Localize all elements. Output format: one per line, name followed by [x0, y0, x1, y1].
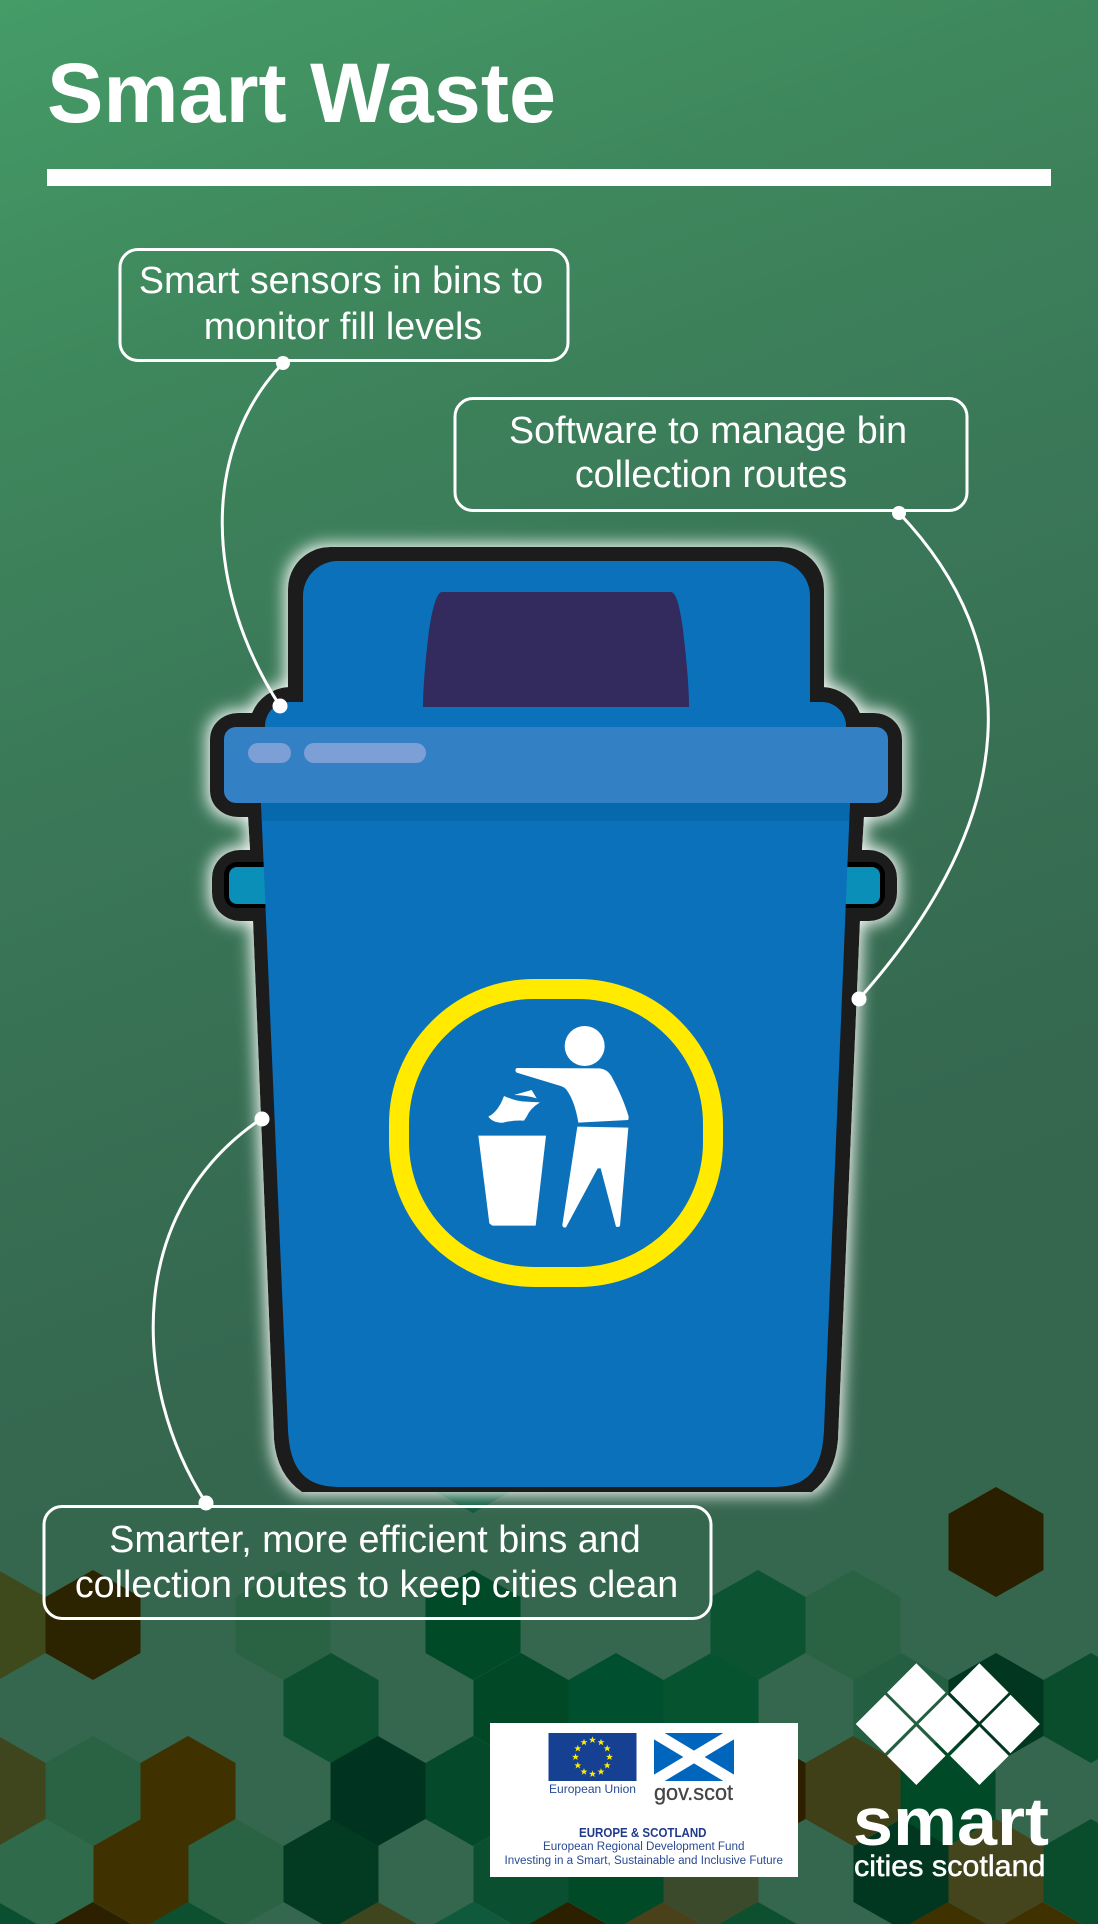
funding text — [504, 1825, 783, 1867]
logo tagline: cities scotland — [854, 1850, 1046, 1883]
bin silhouette with glow — [210, 547, 902, 1492]
text: Smart sensors in bins to — [139, 259, 543, 301]
logo wordmark: smart — [853, 1784, 1049, 1860]
icon: person putting litter in bin — [478, 1026, 629, 1228]
lid dome — [265, 561, 846, 735]
lid rim — [224, 727, 888, 803]
box — [120, 250, 568, 360]
Scottish flag — [654, 1733, 734, 1781]
connector dots — [852, 506, 906, 1006]
funding text: Investing in a Smart, Sustainable and Inclusive Future — [504, 1855, 783, 1867]
rim shadow — [261, 803, 850, 821]
diamond mark — [856, 1663, 1040, 1785]
funding text: EUROPE & SCOTLAND — [579, 1825, 706, 1840]
text — [139, 259, 543, 347]
European Union label: European Union — [549, 1782, 636, 1796]
text: collection routes to keep cities clean — [75, 1563, 678, 1605]
lid opening — [423, 592, 689, 707]
callout: smart sensors — [120, 250, 568, 714]
text: monitor fill levels — [204, 305, 482, 347]
EU flag — [548, 1733, 636, 1781]
callout: software — [455, 398, 988, 1006]
connector line — [153, 1119, 261, 1503]
connector dots — [198, 1112, 270, 1510]
connector dots — [272, 356, 290, 714]
text — [75, 1518, 678, 1605]
box — [44, 1506, 711, 1618]
text: Smarter, more efficient bins and — [109, 1518, 641, 1560]
smart cities scotland logo — [853, 1663, 1049, 1883]
title: Smart Waste — [47, 46, 556, 140]
text — [509, 409, 907, 495]
funding logo panel — [490, 1723, 798, 1877]
callout: smarter bins — [44, 1112, 711, 1618]
illustration: blue wheelie bin — [210, 547, 902, 1492]
icon: yellow ring — [399, 989, 713, 1277]
bin body — [261, 803, 850, 1487]
white panel — [490, 1723, 798, 1877]
handle bar — [224, 862, 885, 908]
rim highlights — [248, 743, 426, 763]
box — [455, 398, 967, 510]
connector line — [222, 363, 283, 706]
text: collection routes — [575, 453, 847, 495]
funding text: European Regional Development Fund — [543, 1841, 744, 1853]
text: Software to manage bin — [509, 409, 907, 451]
hexagon pattern — [0, 1403, 1098, 1924]
connector line — [859, 513, 988, 999]
title rule — [47, 169, 1051, 186]
gov.scot label: gov.scot — [654, 1780, 733, 1805]
